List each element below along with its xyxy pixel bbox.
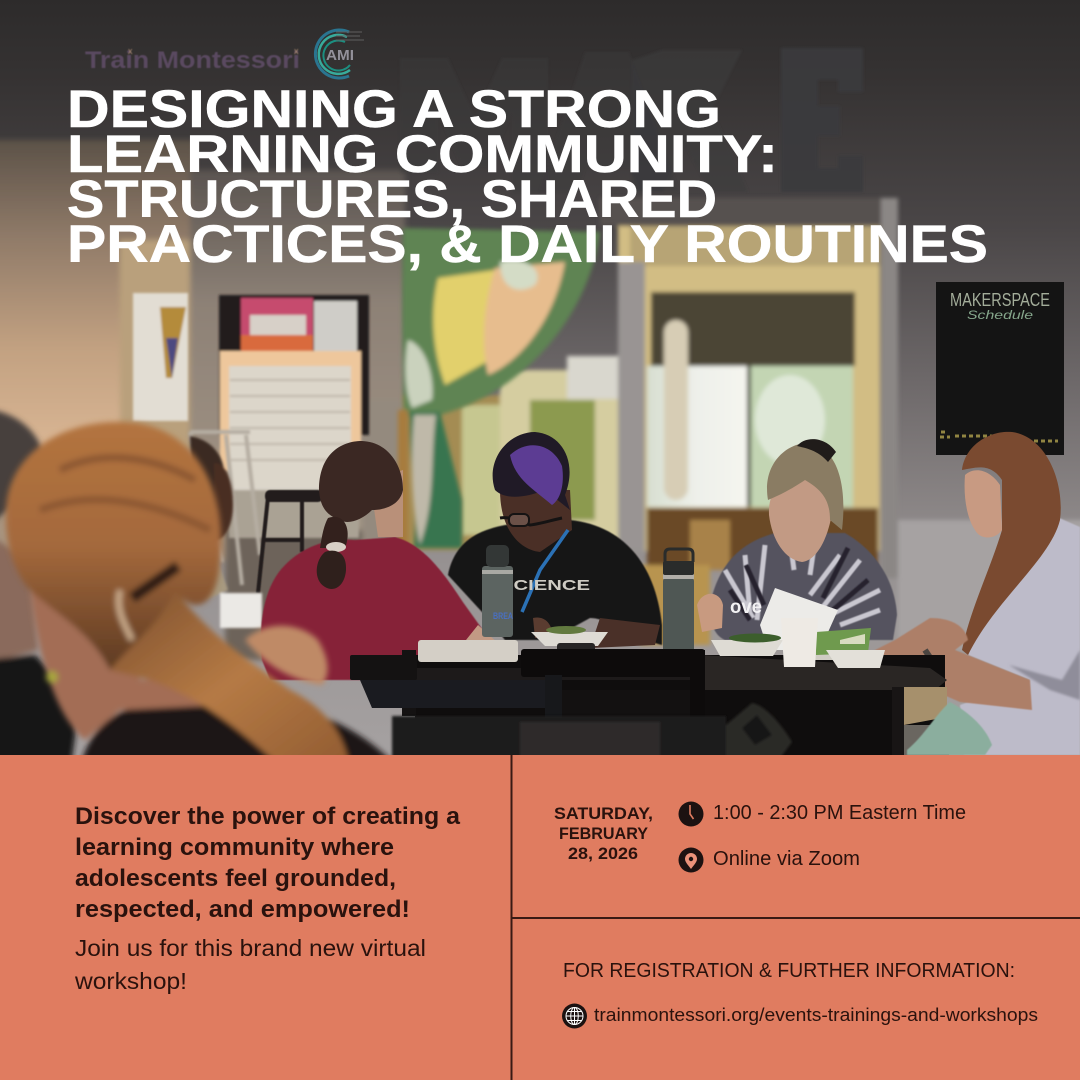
woman with purple hair: SCIENCE xyxy=(500,577,590,594)
far left blurred person xyxy=(0,408,80,775)
person hidden behind foreground woman xyxy=(190,436,262,628)
text block: workshop description: Discover the power of creating a xyxy=(75,803,460,830)
chalkboard xyxy=(936,282,1064,455)
plates, cups and food xyxy=(418,626,885,668)
date: FEBRUARY xyxy=(559,825,648,843)
woman in red shirt xyxy=(261,441,511,680)
bulletin board and calendar xyxy=(219,295,369,538)
text block: workshop description xyxy=(74,803,460,994)
text block: workshop description: respected, and empowered! xyxy=(75,896,410,923)
title: LEARNING COMMUNITY: xyxy=(67,125,778,184)
logo: Train Montessori and AMI: Train Montessori xyxy=(85,47,300,74)
photo: workshop participants at a table xyxy=(0,0,1080,775)
table xyxy=(415,655,949,755)
date: SATURDAY, xyxy=(554,805,653,823)
icon: globe xyxy=(562,1004,587,1028)
logo: Train Montessori and AMI xyxy=(85,30,364,78)
foreground table xyxy=(390,702,792,755)
water bottles: BREA xyxy=(493,611,513,621)
wall letters: MAKE xyxy=(400,48,863,193)
foreground woman with ponytail xyxy=(6,422,405,775)
date: 28, 2026 xyxy=(568,845,638,863)
title: STRUCTURES, SHARED xyxy=(67,170,717,229)
chalkboard: MAKERSPACE xyxy=(950,290,1050,310)
panel: orange information area xyxy=(0,755,1080,1080)
registration heading: FOR REGISTRATION & FURTHER INFORMATION: xyxy=(563,960,1015,982)
curtain xyxy=(402,228,600,548)
woman with purple hair xyxy=(448,432,662,648)
title: PRACTICES, & DAILY ROUTINES xyxy=(67,215,988,274)
dark stool xyxy=(258,492,321,593)
text block: workshop description: adolescents feel grounded, xyxy=(75,865,396,892)
wall on the left with cabinets xyxy=(0,140,405,660)
registration link: trainmontessori.org/events-trainings-and-workshops xyxy=(594,1004,1038,1025)
event time: 1:00 - 2:30 PM Eastern Time xyxy=(713,802,966,824)
white notice panel and pennant xyxy=(133,293,188,421)
doorway, room and windows xyxy=(403,198,1080,650)
text block: workshop description: learning community where xyxy=(75,834,394,861)
logo: Train Montessori and AMI: x xyxy=(128,46,133,56)
title xyxy=(67,80,988,274)
chairs xyxy=(350,649,705,716)
icon: clock xyxy=(678,802,704,826)
woman in grey t-shirt xyxy=(869,432,1080,755)
title: DESIGNING A STRONG xyxy=(67,80,721,139)
woman in tie-dye shirt xyxy=(697,439,897,650)
icon: location pin xyxy=(678,848,704,872)
woman in tie-dye shirt: ove xyxy=(730,597,762,618)
logo: Train Montessori and AMI: AMI xyxy=(326,47,354,64)
text block: workshop description: workshop! xyxy=(74,968,187,994)
text block: workshop description: Join us for this brand new virtual xyxy=(75,935,426,961)
cloth on chair xyxy=(907,702,992,755)
chalkboard: Schedule xyxy=(967,308,1033,322)
date xyxy=(554,805,653,863)
event location: Online via Zoom xyxy=(713,848,860,870)
logo: Train Montessori and AMI: x xyxy=(294,46,299,56)
tall stool xyxy=(190,432,260,585)
water bottles xyxy=(482,545,694,653)
